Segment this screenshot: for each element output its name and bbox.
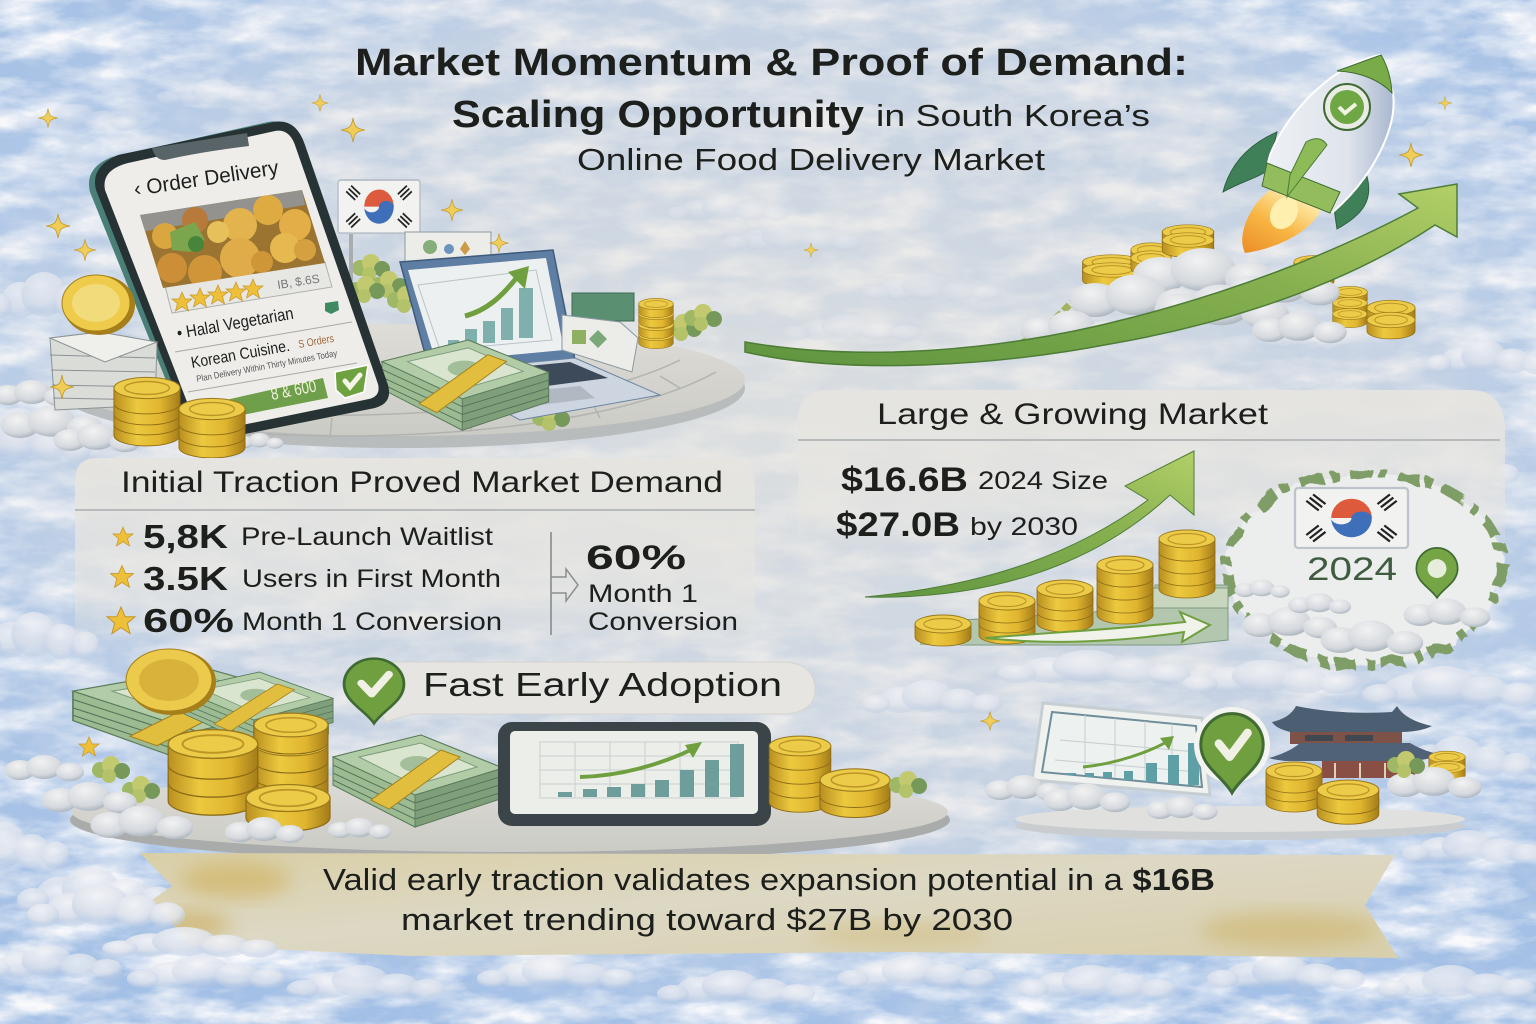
rocket — [1223, 55, 1394, 253]
green cards — [562, 293, 638, 372]
paper stack — [50, 332, 157, 410]
laptop with growth chart — [400, 250, 660, 420]
green tag — [325, 301, 339, 314]
mossy path — [1000, 288, 1085, 353]
panel background — [75, 458, 755, 640]
sparkle — [79, 737, 99, 756]
coin stacks — [168, 713, 330, 831]
food photo — [140, 190, 325, 288]
coin stack by laptop — [639, 298, 673, 349]
money bundle — [382, 340, 549, 430]
dietary tags: • Halal Vegetarian — [175, 304, 295, 343]
chart card — [1032, 703, 1210, 795]
title: Scaling Opportunity — [452, 94, 864, 136]
market size figures: 2024 Size — [978, 467, 1108, 495]
market size figures: $27.0B — [836, 506, 960, 544]
label: 2024: 2024 — [1307, 551, 1397, 587]
coin stacks — [1266, 762, 1379, 824]
Korea island — [1227, 472, 1503, 664]
icon: check pin — [344, 659, 404, 723]
stone steps — [920, 585, 1228, 645]
coin stacks — [1083, 225, 1415, 339]
large coin — [62, 275, 135, 335]
panel background — [798, 390, 1505, 545]
title — [355, 42, 1188, 177]
stone platform — [70, 772, 950, 862]
banner: closing statement: market trending toward $27B by 2030 — [401, 902, 1013, 937]
cloud puffs — [1020, 248, 1347, 344]
panel heading: Large & Growing Market — [877, 398, 1269, 431]
icon: check badge — [1324, 84, 1370, 130]
icon: check pin — [1194, 707, 1270, 793]
stat row: users: 3.5K — [143, 560, 228, 597]
scene: Korea temple platform — [980, 703, 1482, 840]
scene: fast early adoption platform — [5, 649, 950, 862]
title: Market Momentum & Proof of Demand: — [355, 42, 1188, 84]
rating card — [165, 262, 332, 313]
title: in South Korea’s — [876, 98, 1150, 133]
rocks under platform — [0, 380, 283, 452]
growth arrow — [865, 451, 1194, 597]
rating stars: IB, $.6S — [276, 271, 321, 292]
cloud mound with rising coins — [1000, 225, 1415, 353]
icon: check badge — [335, 365, 368, 398]
flame — [1242, 190, 1322, 253]
stat row: users — [110, 560, 501, 597]
stat row: waitlist: 5,8K — [143, 518, 228, 555]
rocks in front — [5, 755, 391, 843]
banner: closing statement: Valid early traction validates expansion potential in a $16B — [323, 862, 1215, 897]
callout: 60% conversion: Conversion — [588, 608, 738, 636]
sparkle — [980, 711, 1000, 731]
callout: Fast Early Adoption — [372, 662, 815, 722]
callout: 60% conversion: Month 1 — [588, 580, 698, 608]
smartphone: Order Delivery app: Plan Delivery Within Thirty Minutes Today — [196, 348, 338, 384]
stat row: conversion — [107, 602, 502, 639]
stat row: conversion: 60% — [143, 602, 234, 639]
tablet with bar chart — [498, 722, 771, 826]
clouds over banner corner — [27, 884, 278, 958]
body — [1263, 55, 1394, 212]
stone platform — [1015, 806, 1465, 840]
rating stars — [172, 271, 321, 311]
market size figures — [836, 461, 1108, 544]
small card behind laptop — [405, 232, 491, 264]
callout: Fast Early Adoption: Fast Early Adoption — [423, 666, 782, 703]
money stacks — [73, 668, 333, 765]
callout: 60% conversion — [586, 539, 738, 636]
foliage — [92, 756, 927, 803]
stat row: waitlist — [113, 518, 493, 555]
divider with arrow — [551, 532, 578, 635]
cuisine text: Korean Cuisine. — [190, 338, 291, 372]
stone platform — [55, 324, 745, 448]
temple — [1269, 706, 1443, 778]
panel: large and growing market — [798, 390, 1505, 664]
callout: 60% conversion: 60% — [586, 539, 686, 577]
smartphone: Order Delivery app — [89, 121, 389, 442]
market size figures: by 2030 — [970, 513, 1078, 541]
large coin — [126, 649, 216, 715]
icon: Korean flag on pole — [338, 180, 420, 281]
sparkles — [38, 95, 818, 399]
small white arrow on steps — [985, 612, 1210, 642]
coin stacks rising — [915, 530, 1215, 646]
green bushes — [347, 254, 722, 431]
coins right of tablet — [769, 736, 890, 818]
order button — [217, 376, 328, 418]
sparkles near rocket — [1399, 96, 1452, 167]
back coins — [1429, 751, 1465, 781]
big growth arrow — [745, 184, 1457, 366]
stat row: waitlist: Pre-Launch Waitlist — [241, 523, 493, 551]
right fin — [1332, 170, 1369, 229]
app header text: ‹ Order Delivery — [132, 156, 281, 201]
nose cone — [1337, 55, 1392, 93]
icon: map pin — [1416, 548, 1458, 598]
rocks — [985, 751, 1482, 820]
order button: 8 & 600 — [269, 376, 318, 404]
title: Online Food Delivery Market — [577, 142, 1045, 177]
icon: Korean flag — [1295, 488, 1408, 548]
left fin — [1223, 132, 1277, 192]
panel: initial traction — [75, 458, 755, 640]
stat row: users: Users in First Month — [242, 565, 501, 593]
money bundle — [333, 735, 503, 827]
banner: closing statement — [140, 853, 1398, 958]
stat row: conversion: Month 1 Conversion — [242, 608, 502, 636]
smartphone: Order Delivery app: S Orders — [297, 333, 335, 351]
scene: delivery app platform — [0, 95, 818, 458]
coin stacks front of phone — [114, 377, 245, 458]
panel heading: Initial Traction Proved Market Demand — [121, 466, 723, 499]
engine band — [1262, 163, 1340, 213]
market size figures: $16.6B — [841, 461, 968, 499]
